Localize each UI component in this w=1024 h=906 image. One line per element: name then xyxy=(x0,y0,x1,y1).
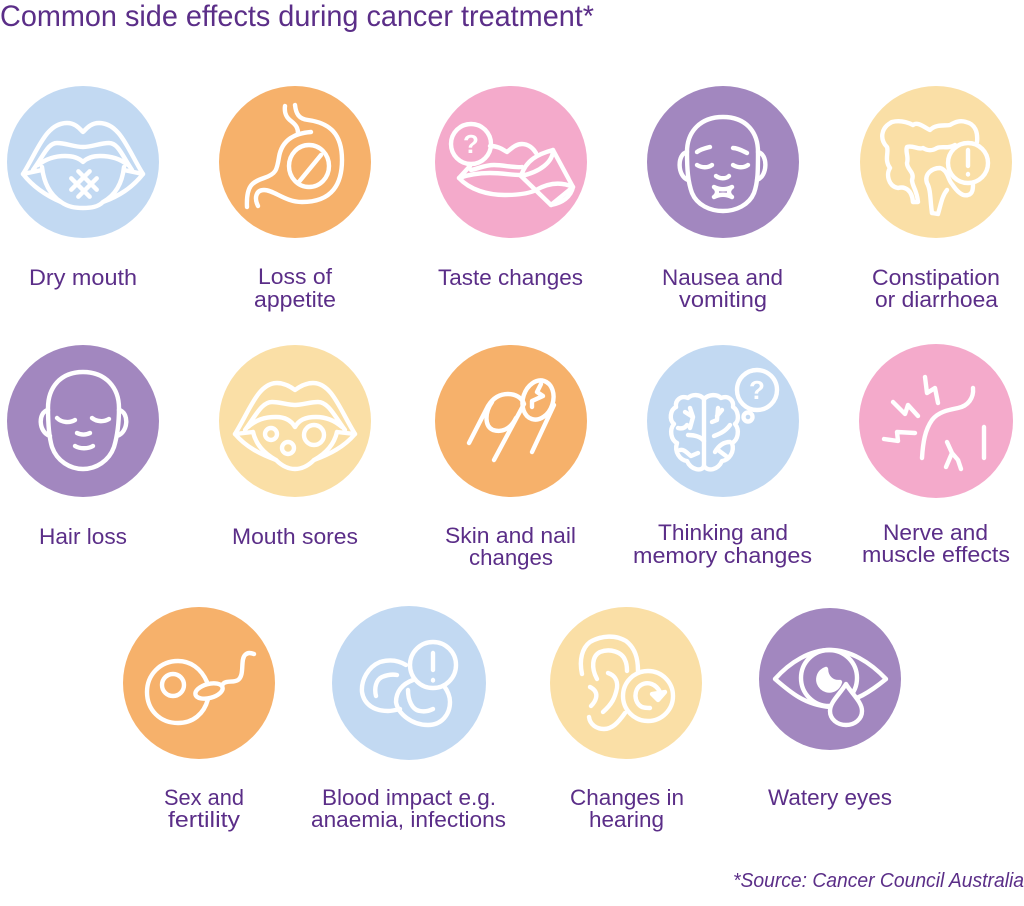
label: skin and nail changes: Skin and nail xyxy=(445,523,576,548)
label: nausea and vomiting xyxy=(662,265,783,312)
label: constipation or diarrhoea xyxy=(872,265,1000,312)
icon: stomach with no symbol xyxy=(219,86,371,238)
label: hair loss: Hair loss xyxy=(39,524,127,549)
panel: taste changes xyxy=(435,86,587,290)
label: constipation or diarrhoea: Constipation xyxy=(872,265,1000,290)
icon: nauseous face xyxy=(647,86,799,238)
title: Common side effects during cancer treatment* xyxy=(0,0,594,33)
label: sex and fertility: Sex and xyxy=(164,785,244,810)
label: watery eyes: Watery eyes xyxy=(768,785,892,810)
icon: egg and sperm xyxy=(123,607,275,759)
icon: brain with question mark: ? xyxy=(749,375,765,405)
icon: intestines with alert xyxy=(860,86,1012,238)
icon: bald face xyxy=(7,345,159,497)
label: loss of appetite: appetite xyxy=(254,287,336,312)
label: changes in hearing: hearing xyxy=(589,807,664,832)
icon: lips with question mark xyxy=(435,86,587,238)
panel: nerve and muscle effects xyxy=(859,344,1013,567)
label: taste changes: Taste changes xyxy=(438,265,583,290)
label: blood impact xyxy=(311,785,506,832)
panel: hair loss xyxy=(7,345,159,549)
panel: nausea and vomiting xyxy=(647,86,799,312)
label: nerve and muscle effects xyxy=(862,520,1010,567)
panel: mouth sores xyxy=(219,345,371,549)
label: loss of appetite: Loss of xyxy=(258,264,333,289)
label: skin and nail changes xyxy=(445,523,576,570)
icon: ear with rotating arrow xyxy=(550,607,702,759)
panel: blood impact xyxy=(311,606,506,832)
panel: constipation or diarrhoea xyxy=(860,86,1012,312)
label: changes in hearing: Changes in xyxy=(570,785,684,810)
icon: dry mouth xyxy=(7,86,159,238)
label: changes in hearing xyxy=(570,785,684,832)
panel: changes in hearing xyxy=(550,607,702,832)
label: nerve and muscle effects: muscle effects xyxy=(862,542,1010,567)
label: blood impact: anaemia, infections xyxy=(311,807,506,832)
label: thinking and memory changes xyxy=(633,520,812,568)
panel: loss of appetite xyxy=(219,86,371,312)
icon: fingers with cracked nail xyxy=(435,345,587,497)
label: mouth sores: Mouth sores xyxy=(232,524,358,549)
icon: brain with question mark xyxy=(647,345,799,497)
icon: eye with tear drop xyxy=(759,608,901,750)
panel: watery eyes xyxy=(759,608,901,810)
label: sex and fertility xyxy=(164,785,244,832)
label: blood impact: Blood impact e.g. xyxy=(322,785,496,810)
label: nausea and vomiting: vomiting xyxy=(679,287,767,312)
label: loss of appetite xyxy=(254,264,336,312)
panel: thinking and memory changes xyxy=(633,345,812,568)
label: nerve and muscle effects: Nerve and xyxy=(883,520,988,545)
label: sex and fertility: fertility xyxy=(168,807,240,832)
label: dry mouth: Dry mouth xyxy=(29,265,137,290)
label: thinking and memory changes: memory changes xyxy=(633,543,812,568)
icon: blood cells with alert xyxy=(332,606,486,760)
label: nausea and vomiting: Nausea and xyxy=(662,265,783,290)
panel: sex and fertility xyxy=(123,607,275,832)
icon: lips with question mark: ? xyxy=(463,129,479,159)
panel: dry mouth xyxy=(7,86,159,290)
label: constipation or diarrhoea: or diarrhoea xyxy=(875,287,999,312)
icon: nerve with lightning bolts xyxy=(859,344,1013,498)
panel: skin and nail changes xyxy=(435,345,587,570)
label: skin and nail changes: changes xyxy=(469,545,553,570)
icon: mouth with sores xyxy=(219,345,371,497)
label: thinking and memory changes: Thinking and xyxy=(658,520,788,545)
